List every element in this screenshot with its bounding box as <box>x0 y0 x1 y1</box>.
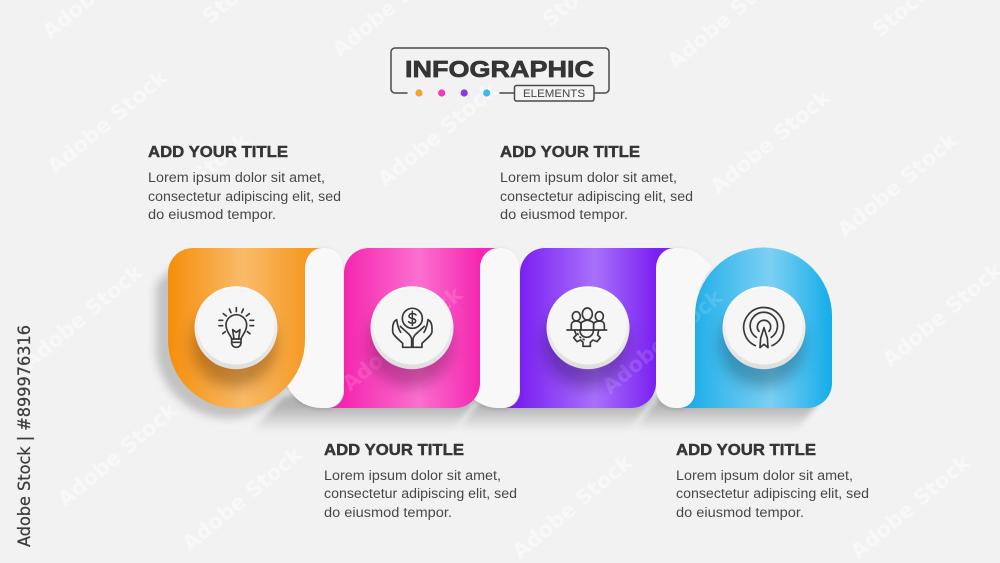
watermark: Adobe Stock <box>373 77 503 192</box>
icon: light bulb <box>219 308 254 347</box>
long drop shadows cast to the lower left <box>156 260 824 432</box>
icon: hands holding coin <box>393 308 432 347</box>
text block 2: consectetur adipiscing elit, sed <box>324 486 517 501</box>
shadow: below blue <box>632 395 824 432</box>
text block 3: Lorem ipsum dolor sit amet, <box>500 170 677 185</box>
shadow: orange <box>156 260 300 418</box>
watermark: Adobe Stock <box>43 64 173 179</box>
text block 2 <box>324 442 517 520</box>
text block 1: Lorem ipsum dolor sit amet, <box>148 170 325 185</box>
text block 2: do eiusmod tempor. <box>324 505 452 520</box>
text block 1: do eiusmod tempor. <box>148 207 276 222</box>
text block 1 <box>148 144 341 222</box>
text block 3: consectetur adipiscing elit, sed <box>500 189 693 204</box>
watermark: Adobe Stock <box>53 397 183 512</box>
watermark: Adobe Stock <box>508 449 638 563</box>
disc 4 with target icon <box>722 286 806 369</box>
heading: INFOGRAPHIC: INFOGRAPHIC <box>405 56 594 82</box>
text block 4: Lorem ipsum dolor sit amet, <box>676 468 853 483</box>
segment 1: orange <box>168 248 322 408</box>
disc shadows on the coloured segments <box>192 303 804 387</box>
text block 4 <box>676 442 869 520</box>
faint watermark over the strip <box>213 281 728 399</box>
subheading box: ELEMENTS: ELEMENTS <box>523 88 585 100</box>
icon: broadcast target <box>744 307 784 348</box>
watermark: Adobe Stock <box>18 259 148 374</box>
faint watermark over the strip: Adobe Stock <box>598 284 728 399</box>
heading badge <box>391 48 609 101</box>
shadow: below pink <box>250 395 480 432</box>
faint watermark over the strip: Stock <box>213 297 280 359</box>
text block 1: consectetur adipiscing elit, sed <box>148 189 341 204</box>
text block 1: ADD YOUR TITLE <box>148 144 288 161</box>
vertical credit: Adobe Stock | #899976316 <box>15 325 35 547</box>
text block 2: ADD YOUR TITLE <box>324 442 464 459</box>
text block 2: Lorem ipsum dolor sit amet, <box>324 468 501 483</box>
segment 2: pink <box>330 248 498 408</box>
disc 2 with money icon <box>370 286 454 369</box>
badge frame <box>391 48 609 93</box>
strip of four coloured segments <box>168 248 832 408</box>
segment 3: purple <box>505 248 674 408</box>
colour dots <box>415 89 490 97</box>
text block 4: consectetur adipiscing elit, sed <box>676 486 869 501</box>
watermark: Adobe Stock <box>833 127 963 242</box>
disc 1 with bulb icon <box>194 286 278 369</box>
connector 3: white <box>656 248 712 408</box>
disc 3 with team icon <box>546 286 630 369</box>
faint watermark over the strip: Adobe Stock <box>338 281 468 396</box>
text block 3: ADD YOUR TITLE <box>500 144 640 161</box>
icon: team and gear <box>567 308 607 346</box>
watermark: Adobe Stock <box>846 449 976 563</box>
text block 3 <box>500 144 693 222</box>
text block 4: ADD YOUR TITLE <box>676 442 816 459</box>
text block 3: do eiusmod tempor. <box>500 207 628 222</box>
segment 4: blue <box>680 248 832 408</box>
subheading box: ELEMENTS <box>514 86 594 101</box>
shadow: below purple <box>456 395 656 432</box>
watermark: Stock <box>188 127 255 189</box>
text block 4: do eiusmod tempor. <box>676 505 804 520</box>
connector 2: white <box>471 248 519 408</box>
connector 1: white <box>287 248 343 408</box>
watermark: Adobe Stock <box>178 441 308 556</box>
watermark: Adobe Stock <box>706 84 836 199</box>
